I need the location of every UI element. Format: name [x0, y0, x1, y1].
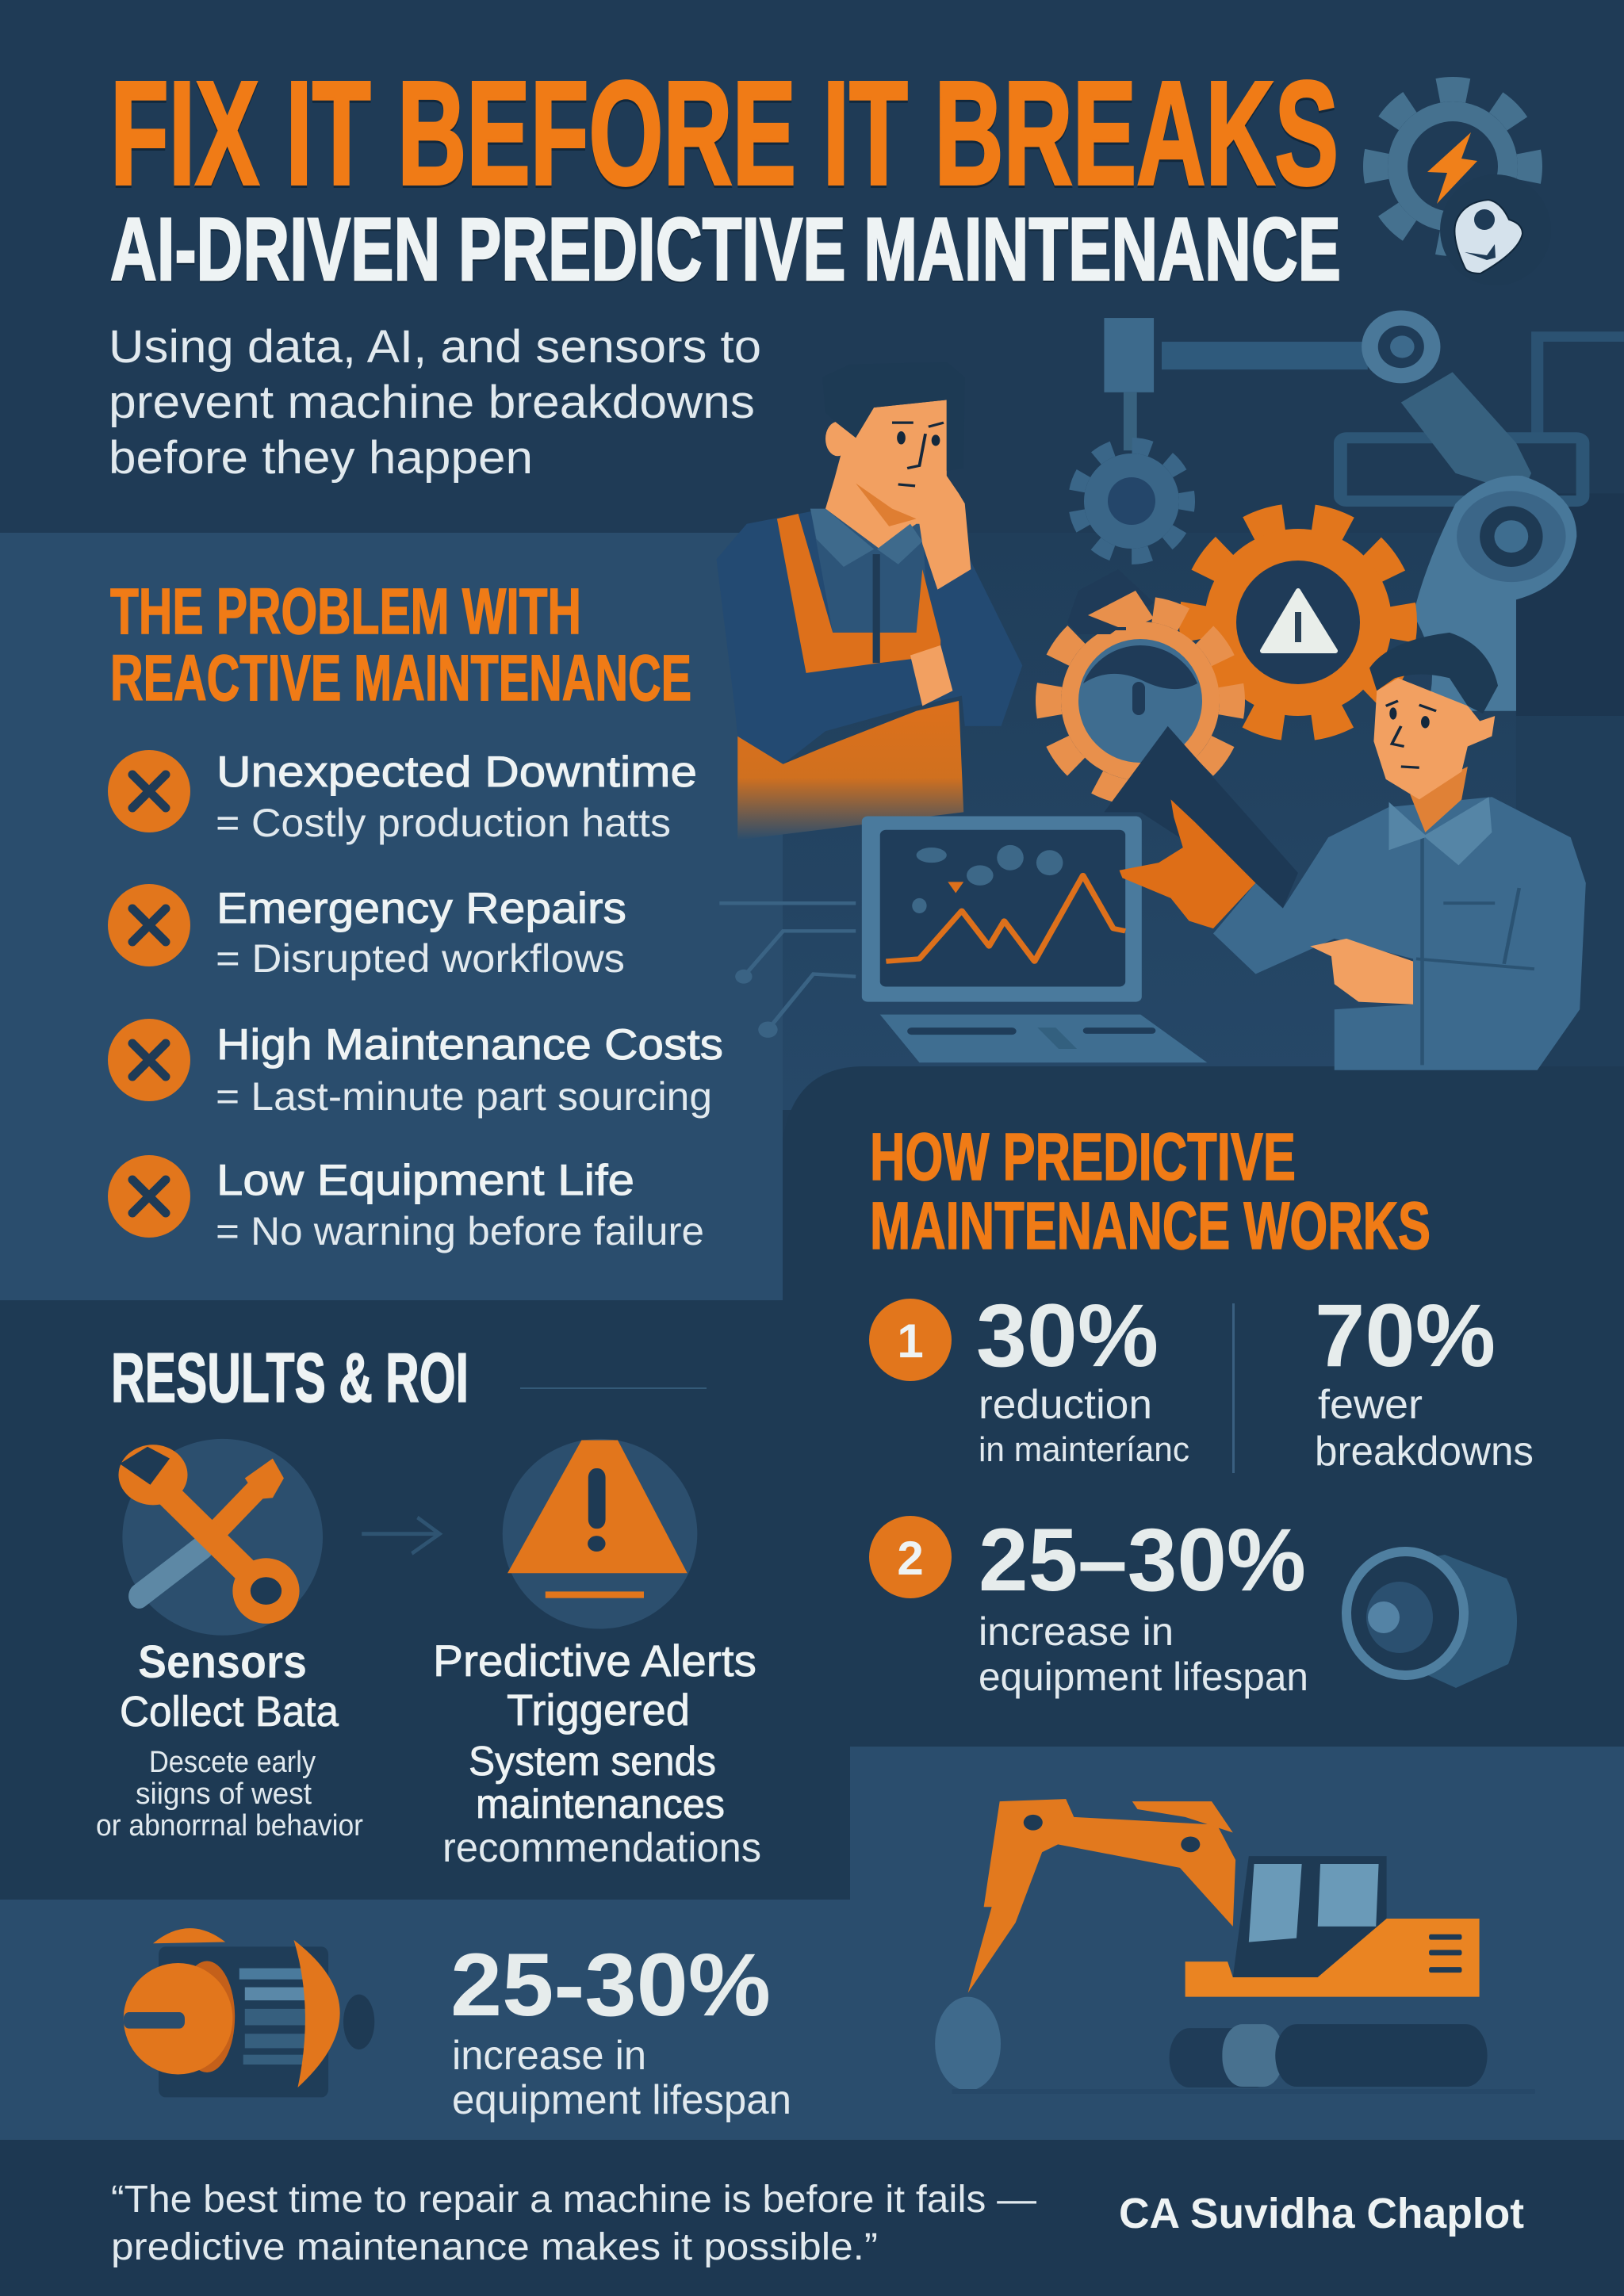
item: emergency repairs: = Disrupted workflows — [216, 936, 625, 981]
heading: problem — [110, 576, 691, 714]
item: emergency repairs — [108, 883, 626, 981]
small background gear — [1076, 446, 1187, 557]
text: predictive alerts triggered: Predictive Alerts — [433, 1636, 756, 1686]
tagline: prevent machine breakdowns — [109, 377, 755, 428]
text: predictive alerts triggered — [433, 1636, 761, 1871]
icon: orange warning gear — [1193, 517, 1404, 728]
stat: 25-30% lifespan: 25–30% — [979, 1510, 1306, 1609]
tagline — [109, 321, 761, 484]
text: sensors collect data: Sensors — [138, 1636, 307, 1688]
heading: problem: THE PROBLEM WITH — [110, 576, 581, 648]
item: high maintenance costs: = Last-minute part sourcing — [216, 1074, 712, 1119]
panel: results background — [0, 1300, 850, 1900]
text: predictive alerts triggered: Triggered — [507, 1685, 690, 1735]
footer background — [0, 2140, 1624, 2296]
heading: how predictive maintenance works: MAINTENANCE WORKS — [870, 1188, 1431, 1263]
icon: crossed wrench and screwdriver — [118, 1439, 323, 1636]
stat: 70% fewer breakdowns: breakdowns — [1315, 1429, 1534, 1475]
stat: 70% fewer breakdowns — [1315, 1286, 1534, 1475]
panel: lifespan stat background — [0, 1900, 850, 2140]
badge: step 1 — [869, 1299, 952, 1381]
text: sensors collect data — [96, 1636, 363, 1843]
text: predictive alerts triggered: recommendations — [442, 1825, 761, 1871]
item: low equipment life: Low Equipment Life — [216, 1155, 634, 1204]
illustration: thinking worker — [716, 362, 1022, 840]
illustration backdrop — [783, 533, 1624, 1110]
item: high maintenance costs: High Maintenance Costs — [216, 1020, 723, 1069]
icon: warning triangle — [503, 1439, 697, 1629]
text: predictive alerts triggered: maintenances — [476, 1781, 725, 1827]
panel: how predictive maintenance works background — [783, 1066, 1624, 1747]
text: sensors collect data: Descete early — [149, 1746, 316, 1779]
stat: 30% reduction: reduction — [979, 1382, 1152, 1428]
icon: gear with bolt and head — [1375, 89, 1551, 285]
stat: 25-30% lifespan: increase in — [979, 1609, 1174, 1654]
badge: step 1: 1 — [897, 1314, 924, 1368]
divider — [1232, 1303, 1235, 1473]
panel: reactive maintenance background — [0, 533, 783, 1300]
icon: roller — [1342, 1547, 1517, 1688]
item: emergency repairs: Emergency Repairs — [216, 883, 626, 932]
tagline: before they happen — [109, 432, 533, 484]
stat: 30% reduction: in mainteríanc — [979, 1430, 1189, 1469]
stat: 30% reduction: 30% — [976, 1286, 1159, 1385]
panel: the problem with reactive maintenance — [108, 576, 723, 1253]
badge: step 2 — [869, 1516, 952, 1598]
illustration: technician pointing — [1104, 633, 1586, 1070]
heading: how predictive maintenance works — [870, 1119, 1431, 1263]
item: unexpected downtime: = Costly production hatts — [216, 801, 671, 845]
text: predictive alerts triggered: System sends — [469, 1739, 716, 1785]
footer quote: predictive maintenance makes it possible.” — [111, 2226, 878, 2268]
stat: 30% reduction — [976, 1286, 1189, 1469]
stat: 25-30% bottom — [450, 1935, 791, 2123]
stat: 25-30% lifespan: equipment lifespan — [979, 1655, 1308, 1699]
stat: 70% fewer breakdowns: fewer — [1318, 1382, 1423, 1428]
footer quote: “The best time to repair a machine is before it fails — — [111, 2179, 1036, 2221]
text: sensors collect data: siigns of west — [136, 1777, 312, 1811]
heading: problem: REACTIVE MAINTENANCE — [110, 642, 691, 714]
text: sensors collect data: Collect Bata — [120, 1688, 339, 1735]
heading: how predictive maintenance works: HOW PREDICTIVE — [870, 1119, 1296, 1194]
item: unexpected downtime: Unexpected Downtime — [216, 747, 697, 796]
stat: 25-30% bottom: 25-30% — [450, 1935, 771, 2034]
illustration: laptop with chart — [862, 816, 1207, 1062]
panel: excavator background — [850, 1747, 1624, 2140]
tagline: Using data, AI, and sensors to — [109, 321, 761, 373]
stat: 25-30% lifespan — [979, 1510, 1308, 1699]
item: unexpected downtime — [108, 747, 697, 845]
item: low equipment life: = No warning before failure — [216, 1209, 704, 1253]
stat: 70% fewer breakdowns: 70% — [1315, 1286, 1496, 1385]
footer author: CA Suvidha Chaplot — [1119, 2190, 1524, 2237]
heading: results and ROI: RESULTS & ROI — [111, 1338, 469, 1417]
arrow: sensors to alerts — [362, 1517, 439, 1553]
icon: light orange gear — [1048, 569, 1232, 793]
text: sensors collect data: or abnorrnal behavior — [96, 1809, 363, 1843]
item: high maintenance costs — [108, 1019, 723, 1119]
background machinery illustration — [719, 310, 1624, 1085]
badge: step 2: 2 — [897, 1532, 924, 1585]
stat: 25-30% bottom: increase in — [452, 2033, 646, 2079]
footer quote — [111, 2179, 1036, 2268]
illustration: excavator — [935, 1799, 1535, 2094]
stat: 25-30% bottom: equipment lifespan — [452, 2077, 791, 2123]
item: low equipment life — [108, 1155, 704, 1253]
icon: motor — [124, 1928, 374, 2097]
